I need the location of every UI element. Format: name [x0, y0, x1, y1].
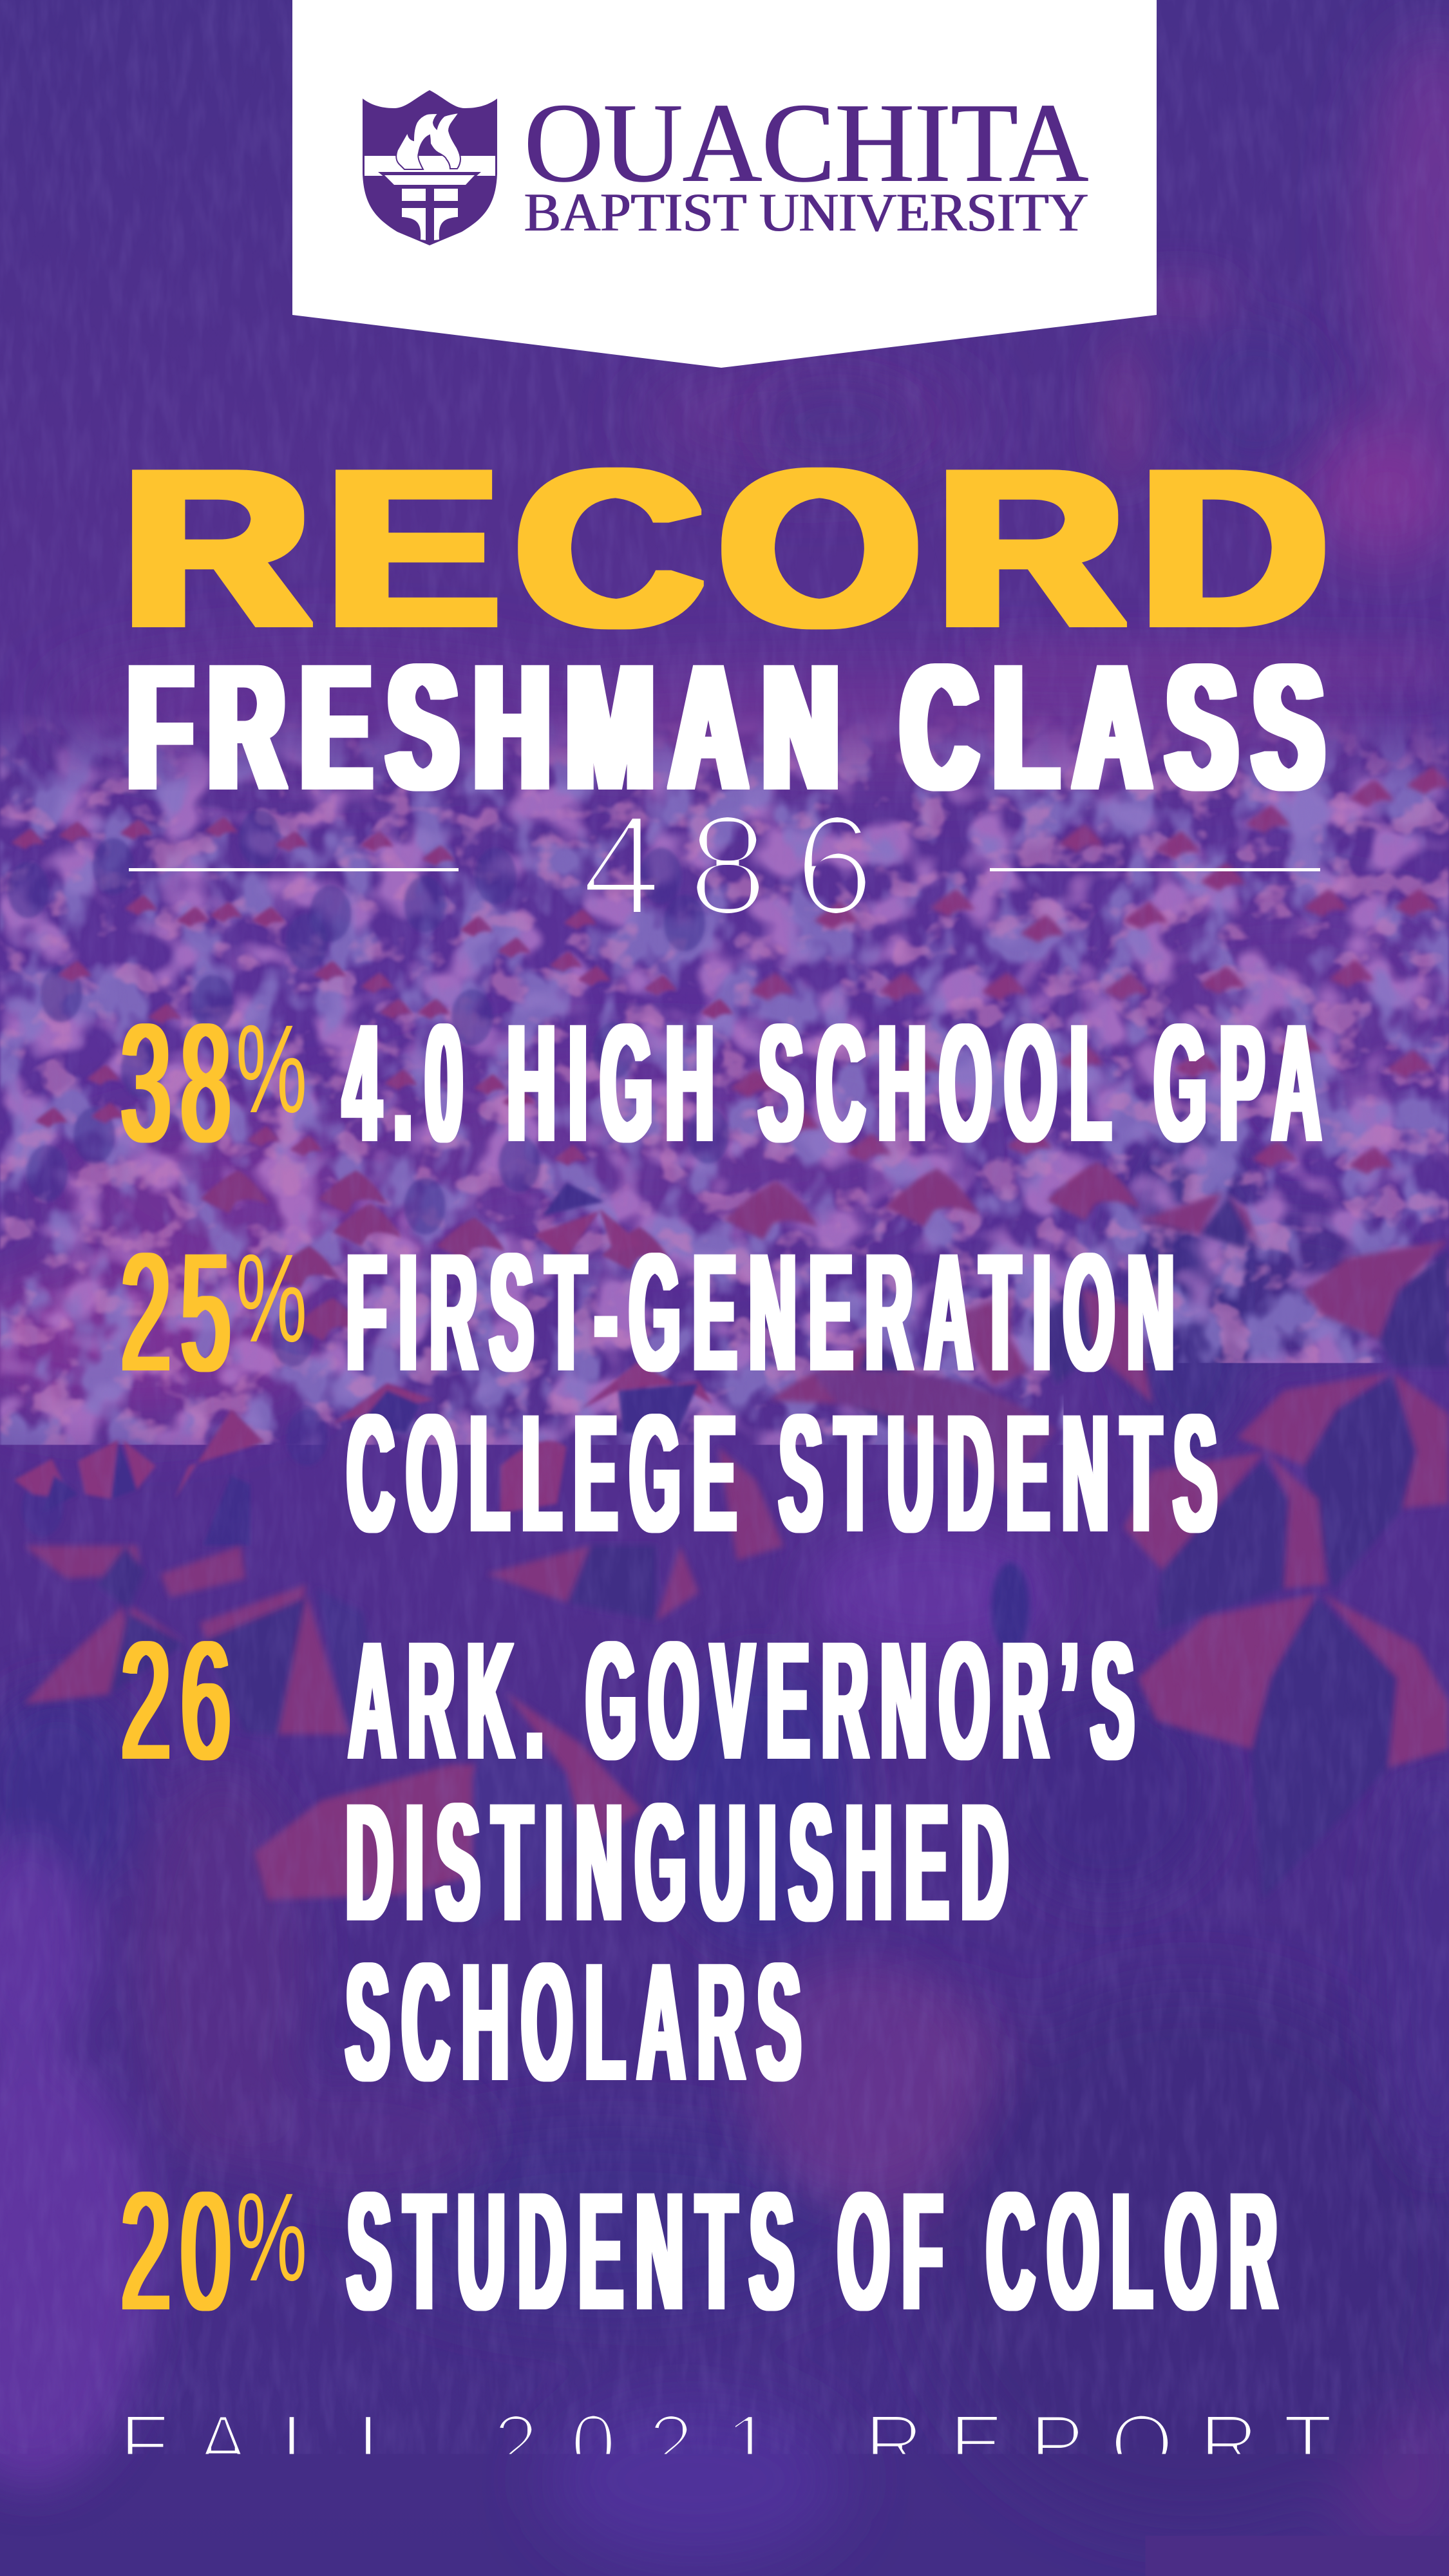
stat: 4.0 GPA: %: [236, 999, 307, 1139]
footer: report date: FALL: [120, 2399, 402, 2488]
total count with rules: [129, 786, 1320, 945]
heading: record: RECORD: [122, 424, 1343, 672]
white logo banner: [292, 0, 1157, 368]
stat: first generation: %: [236, 1228, 307, 1368]
footer: report date: [120, 2399, 1332, 2488]
stat: 4.0 GPA: 38: [121, 990, 241, 1176]
footer: report date: 2021: [493, 2399, 771, 2488]
footer: report date: REPORT: [865, 2399, 1332, 2488]
crowd mottled texture: [0, 708, 1449, 1546]
far right crowd hats: [724, 766, 1449, 1240]
stat: first generation: [121, 1219, 1229, 1566]
icon: university shield with torch: [363, 90, 497, 245]
logo wordmark: Baptist University: BAPTIST UNIVERSITY: [524, 182, 1088, 243]
large foreground hats left: [24, 1546, 699, 1932]
total count number: 486: [582, 786, 901, 945]
stat: first generation: 25: [121, 1219, 241, 1405]
upper crowd hats: [8, 810, 734, 1545]
logo wordmark: Ouachita: OUACHITA: [524, 80, 1088, 206]
stat: governor's scholars: [121, 1607, 1146, 2115]
stat: students of color: %: [236, 2167, 307, 2307]
stat: students of color: 20: [121, 2158, 241, 2344]
large foreground hats right: [718, 1192, 1449, 1900]
stat: governor's scholars: 26: [121, 1607, 241, 1794]
